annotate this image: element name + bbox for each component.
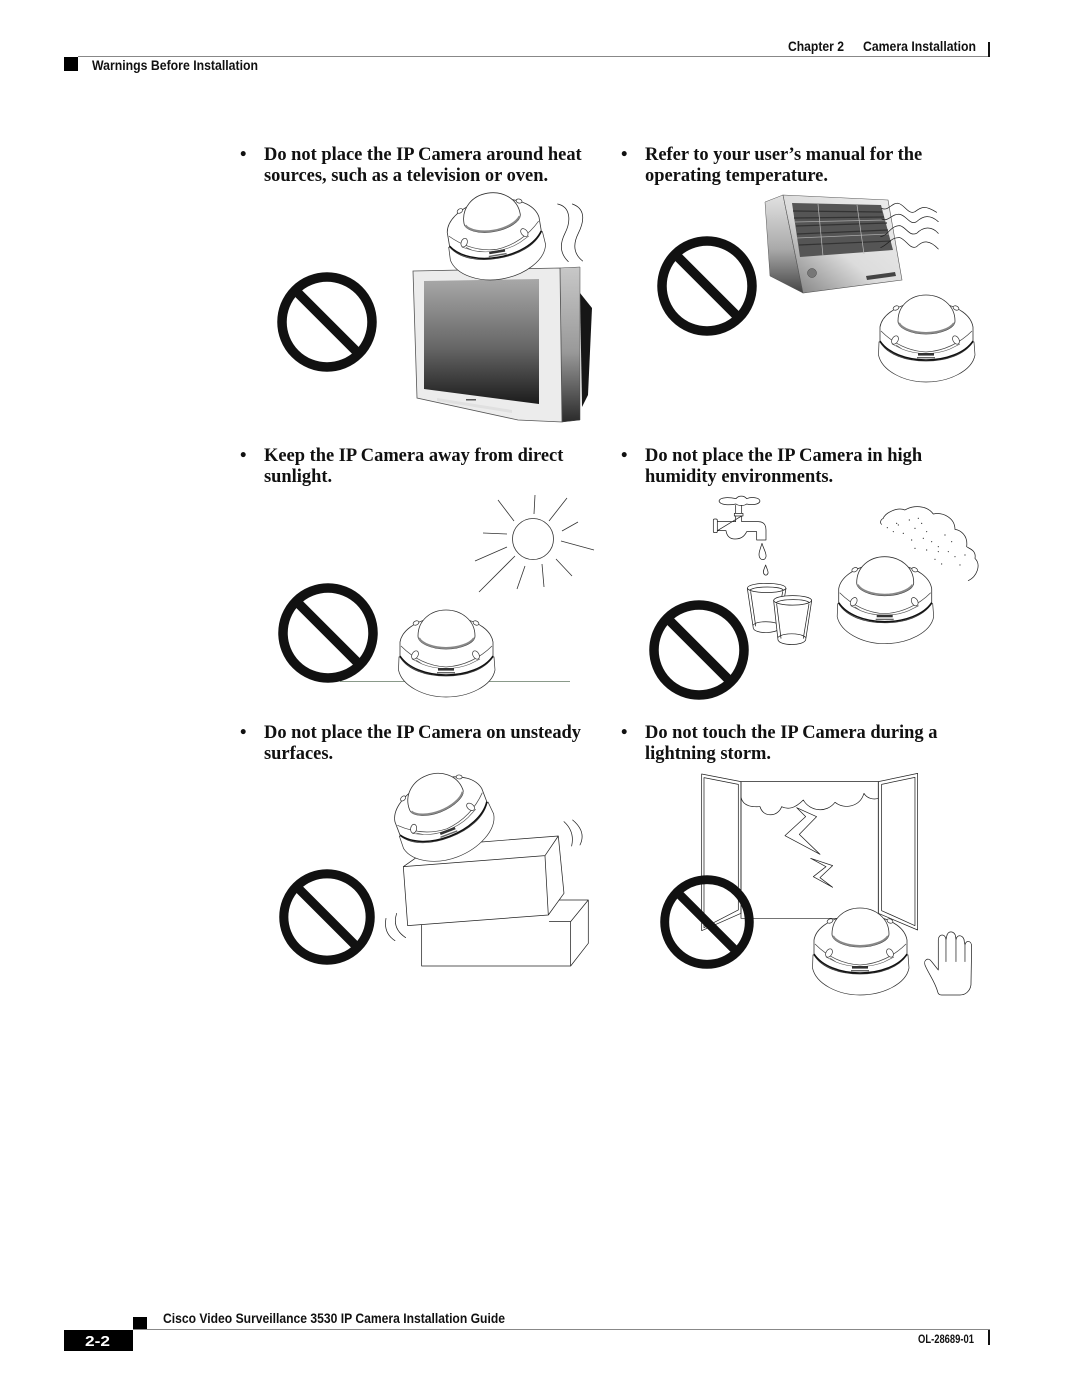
running section title: Warnings Before Installation [92,57,258,73]
heater [765,195,902,293]
prohibition sign [665,880,749,964]
warning text: operating temperature: operating temperature. [645,165,828,185]
warning text: high humidity: Do not place the IP Camera in high [645,445,922,465]
page number box [64,1330,133,1351]
warning text: heat sources: Do not place the IP Camera around heat [264,144,583,164]
illustration: camera in sunlight [283,495,594,697]
warning text: high humidity: humidity environments. [645,466,833,486]
page header [64,38,990,73]
warning text: unsteady surfaces: • [240,722,246,742]
window with clouds and lightning [702,773,918,931]
ground line [340,680,570,682]
humid cloud [881,507,978,581]
warning text: heat sources: sources, such as a television or oven. [264,165,548,185]
header square [64,57,78,71]
stacked boxes and vibration marks [385,820,588,966]
header end bar [988,42,990,57]
prohibition sign [654,605,744,695]
hand icon [925,932,972,995]
warning text: lightning storm: lightning storm. [645,743,771,763]
prohibition sign [283,588,373,678]
guide title: Cisco Video Surveillance 3530 IP Camera Installation Guide [163,1310,505,1326]
illustration: camera on television [282,185,592,422]
footer square [133,1317,147,1329]
document number: OL-28689-01 [918,1332,974,1346]
camera [398,610,495,697]
illustration: camera on unsteady boxes [284,758,588,966]
section label: Camera Installation [863,38,976,54]
illustration: heater and camera [662,195,975,382]
warm air waves [881,203,938,249]
camera [440,185,550,287]
heat waves [558,204,583,262]
prohibition sign [662,241,752,331]
warning text: unsteady surfaces: Do not place the IP Camera on unsteady [264,722,582,742]
illustration: lightning storm through window [665,773,972,995]
faucet and drops [713,496,768,575]
warning text: unsteady surfaces: surfaces. [264,743,333,763]
sun [475,495,594,592]
warning text: operating temperature: Refer to your user’s manual for the [645,144,922,164]
warning text: heat sources: • [240,144,246,164]
page number: 2-2 [85,1333,110,1350]
camera [812,908,909,995]
warning text: direct sunlight: Keep the IP Camera away from direct [264,445,564,465]
warning text: lightning storm: • [621,722,627,742]
camera [382,758,503,874]
camera [837,557,934,644]
warning text: direct sunlight: • [240,445,246,465]
page footer [64,1310,990,1351]
camera [878,295,975,382]
warning text: lightning storm: Do not touch the IP Camera during a [645,722,937,742]
water glasses [747,583,812,644]
illustration: water and humid air [654,496,978,695]
warning text: direct sunlight: sunlight. [264,466,332,486]
prohibition sign [284,874,370,960]
warning text: high humidity: • [621,445,627,465]
warning text: operating temperature: • [621,144,627,164]
footer end bar [988,1330,990,1345]
television [413,267,592,422]
prohibition sign [282,277,372,367]
chapter label: Chapter 2 [788,38,844,54]
